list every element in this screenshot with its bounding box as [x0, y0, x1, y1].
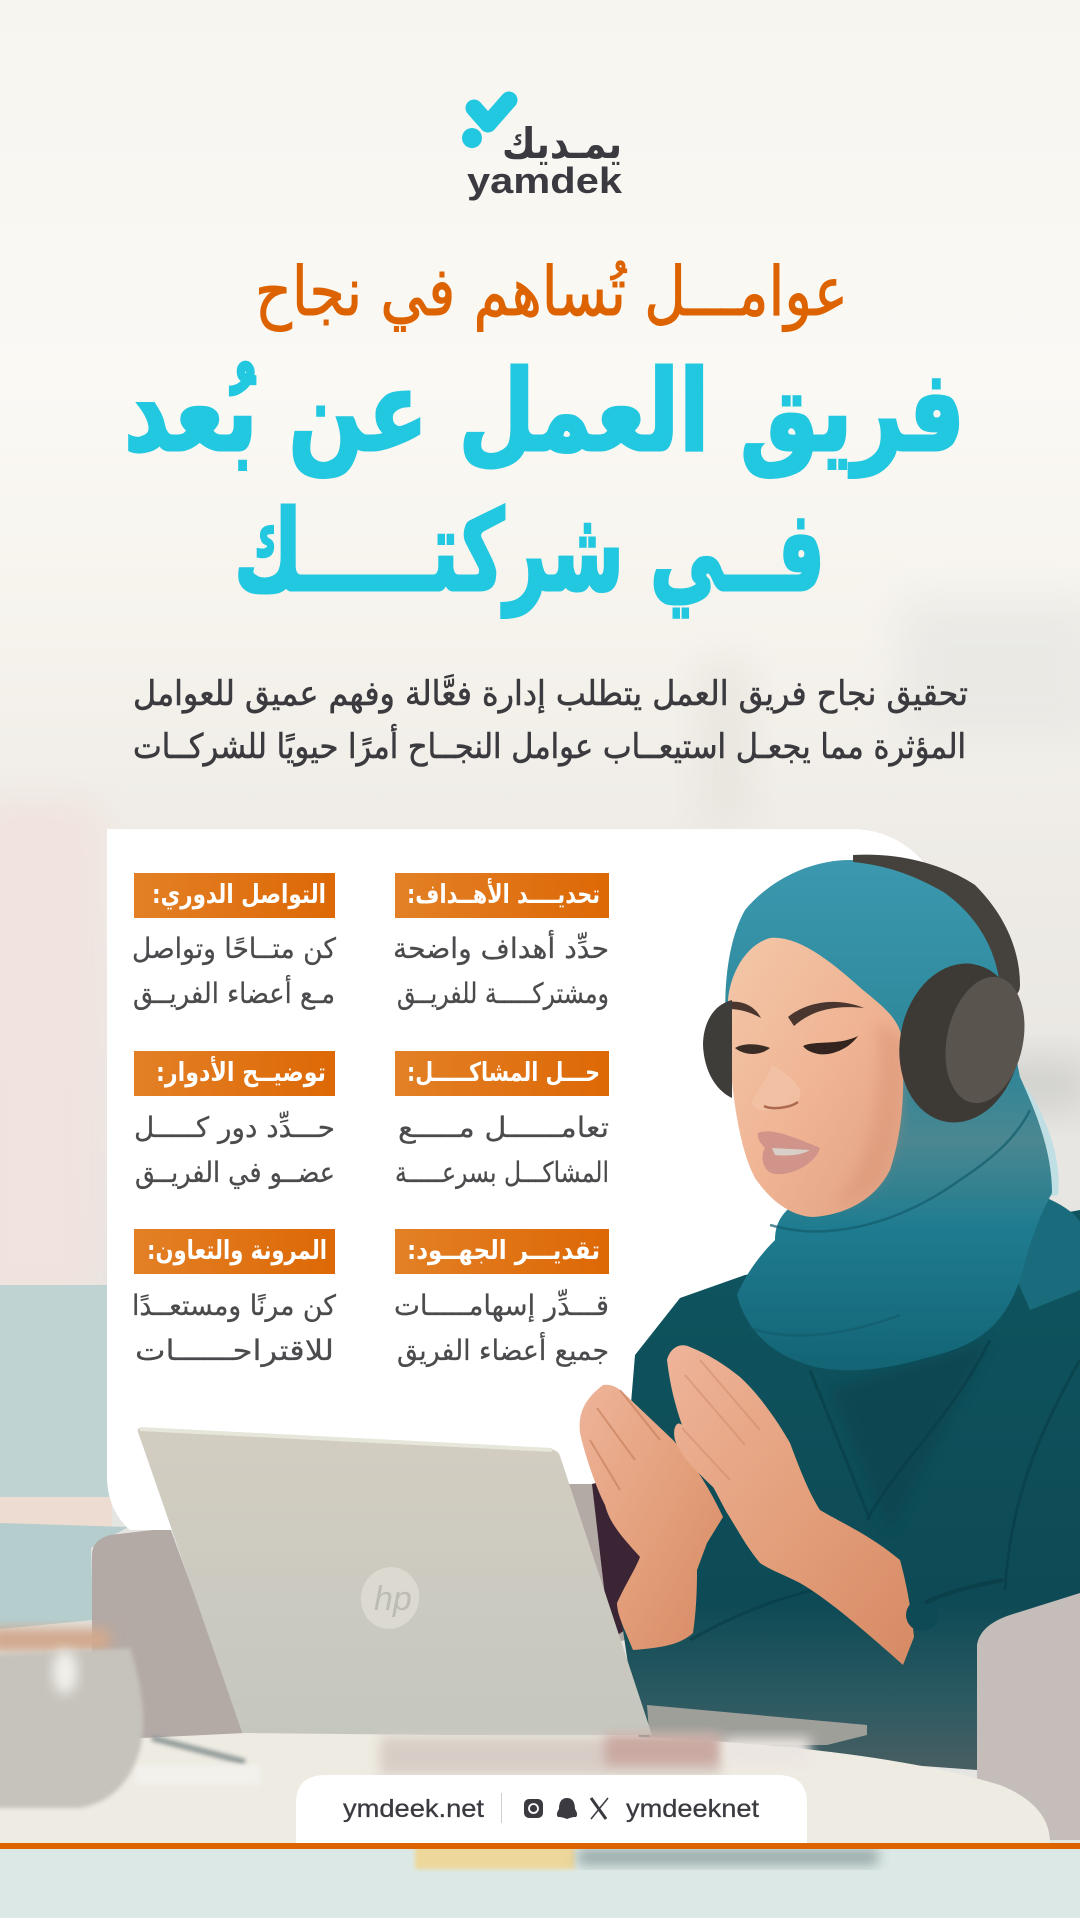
description line 2: المشاكـــل بسرعـــــة — [395, 1156, 609, 1189]
label text: تقديـــر الجهــود: — [407, 1236, 600, 1266]
label text: توضيــح الأدوار: — [156, 1056, 326, 1088]
under-seat shadow — [0, 1628, 110, 1652]
logo — [462, 100, 623, 201]
divider — [501, 1793, 502, 1823]
right earcup — [887, 954, 1035, 1132]
factor: problem solving — [395, 1051, 609, 1189]
description line 1: حـــدِّد دور كـــــل — [134, 1111, 335, 1144]
hijab drape folds — [750, 1110, 1030, 1336]
label — [134, 1229, 335, 1274]
laptop base — [647, 1705, 867, 1745]
right hand and forearm — [667, 1345, 914, 1665]
teeth — [772, 1148, 810, 1155]
description line 1: تعامــــــل مـــــع — [398, 1111, 609, 1144]
logo letters: hp — [374, 1580, 412, 1618]
label text: المرونة والتعاون: — [147, 1236, 327, 1266]
intro line 2: المؤثرة مما يجعـل استيعــاب عوامل النجــاح أمرًا حيويًا للشركــات — [133, 724, 966, 767]
HP logo — [354, 1561, 426, 1635]
laptop lid — [138, 1428, 652, 1735]
logo Latin wordmark: yamdek — [467, 160, 623, 201]
left eyebrow — [728, 1002, 761, 1018]
subtitle: عوامـــل تُساهم في نجاح — [255, 253, 848, 332]
laptop — [138, 1428, 867, 1745]
cuff button — [906, 1599, 938, 1631]
ear pad — [887, 954, 1033, 1132]
icon: instagram — [524, 1799, 543, 1818]
right eye — [803, 1036, 858, 1054]
right eyebrow — [788, 1002, 864, 1026]
factor: goals — [393, 873, 609, 1010]
label — [395, 1229, 609, 1274]
hijab halo — [1025, 1085, 1059, 1198]
description line 2: للاقتراحــــــات — [135, 1334, 334, 1367]
pen — [152, 1738, 245, 1762]
headband — [853, 855, 1020, 996]
panel: white card — [107, 829, 985, 1530]
description line 2: عضــو في الفريــق — [135, 1156, 335, 1189]
notebook — [135, 1765, 260, 1785]
illustration: woman with headphones — [555, 855, 1080, 1770]
maroon inner garment — [592, 1470, 650, 1640]
factor: appreciation — [394, 1229, 609, 1367]
label text: تحديــــد الأهــداف: — [407, 878, 600, 910]
background: right sofa arm — [977, 1593, 1080, 1840]
description line 1: كن مرنًا ومستعــدًا — [132, 1289, 337, 1322]
label text: حـــل المشاكـــــل: — [407, 1058, 600, 1088]
hijab — [725, 860, 1052, 1370]
description line 2: ومشتركـــــة للفريــق — [397, 977, 609, 1010]
footer pill — [296, 1775, 807, 1843]
description line 2: جميع أعضاء الفريق — [397, 1331, 609, 1367]
mauve sofa back behind arm — [555, 1484, 625, 1650]
background: grey sofa — [92, 1528, 250, 1745]
label text: التواصل الدوري: — [152, 880, 326, 910]
blurred pink reflection — [605, 1735, 720, 1765]
nose — [752, 1065, 800, 1111]
ear shell — [935, 969, 1035, 1111]
description line 1: حدِّد أهداف واضحة — [393, 929, 609, 965]
bottom strip — [0, 1845, 1080, 1918]
icon: check mark — [474, 100, 509, 124]
factor: flexibility — [132, 1229, 337, 1367]
left hand finger creases — [590, 1390, 660, 1490]
nose shadow — [764, 1102, 798, 1108]
cup highlight — [53, 1650, 77, 1694]
logo Arabic wordmark: يمـديك — [502, 119, 622, 168]
background: blue chair — [0, 1285, 128, 1629]
table — [0, 1733, 1050, 1843]
factor: roles — [134, 1051, 335, 1189]
robe shading — [830, 1340, 990, 1530]
icon: X — [591, 1798, 608, 1819]
icon: snapchat — [557, 1798, 577, 1819]
blurred reflections — [380, 1737, 720, 1775]
label — [134, 1051, 335, 1096]
left earcup — [703, 1000, 732, 1098]
icon: dot — [462, 128, 482, 148]
social handle: ymdeeknet — [626, 1795, 759, 1823]
cup — [0, 1648, 143, 1808]
description line 1: قـــدِّر إسهامـــــات — [394, 1289, 609, 1322]
face shading — [835, 1020, 905, 1205]
lips — [758, 1131, 820, 1174]
lid edge — [140, 1429, 552, 1450]
blurred white glare — [725, 1738, 810, 1764]
orange footer line — [0, 1843, 1080, 1849]
intro line 1: تحقيق نجاح فريق العمل يتطلب إدارة فعَّالة وفهم عميق للعوامل — [133, 674, 968, 714]
shoulder — [1000, 1195, 1080, 1310]
face — [728, 938, 903, 1217]
factor: communication — [132, 873, 337, 1010]
logo disc — [354, 1561, 426, 1635]
left eye — [735, 1044, 770, 1054]
left hand — [580, 1385, 723, 1650]
description line 1: كن متــاحًا وتواصل — [132, 932, 337, 965]
label — [134, 873, 335, 918]
robe folds — [690, 1340, 1080, 1640]
right hand finger creases — [682, 1360, 760, 1480]
description line 2: مـع أعضاء الفريــق — [133, 974, 335, 1010]
intro paragraph — [133, 674, 968, 767]
body — [620, 1210, 1080, 1770]
label — [395, 1051, 609, 1096]
foreground table and cup — [0, 1628, 1050, 1843]
website: ymdeek.net — [343, 1795, 484, 1823]
cuff loop — [925, 1580, 1003, 1603]
label — [395, 873, 609, 918]
